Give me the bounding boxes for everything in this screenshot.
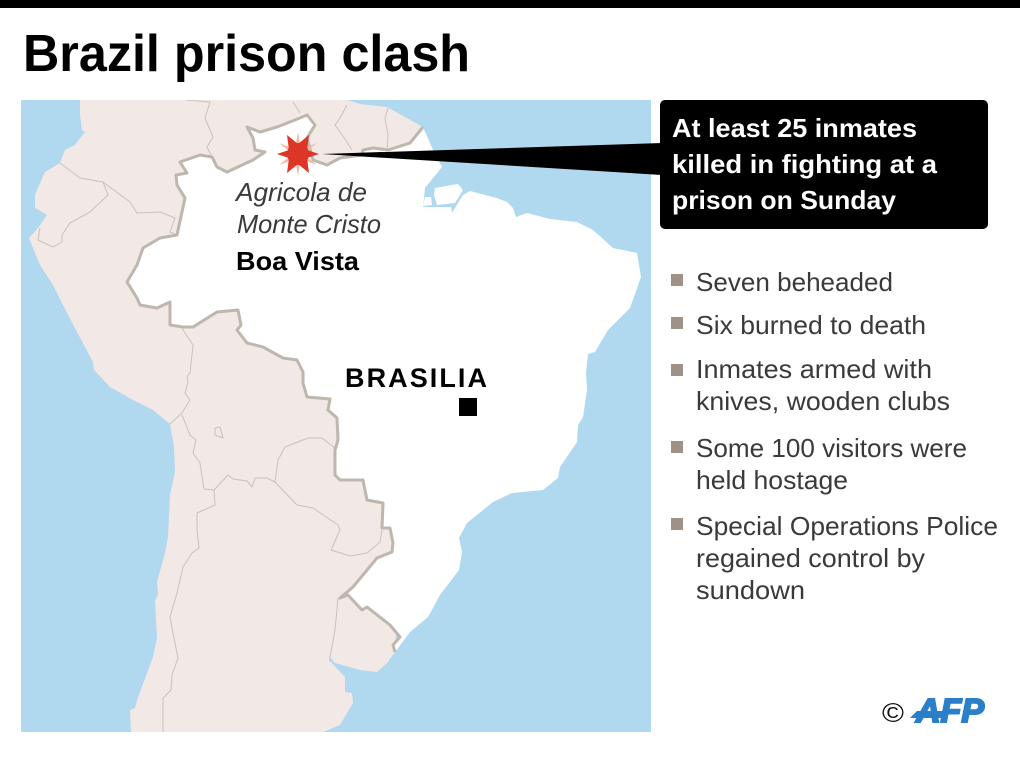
label: Agricola de Monte Cristo: Agricola de xyxy=(234,177,367,207)
country borders xyxy=(38,100,388,732)
bullet: police: Special Operations Police xyxy=(696,511,998,541)
bullet: police: regained control by xyxy=(696,543,925,573)
label: Agricola de Monte Cristo xyxy=(234,177,381,239)
bullet: six burned: Six burned to death xyxy=(696,310,926,340)
bullet: hostages: Some 100 visitors were xyxy=(696,433,967,463)
label: Boa Vista: Boa Vista xyxy=(236,246,360,276)
icon: capital marker xyxy=(459,398,477,416)
callout box: prison on Sunday xyxy=(672,185,897,215)
bullet: hostages xyxy=(671,433,967,495)
bullet: seven beheaded: Seven beheaded xyxy=(696,267,893,297)
callout box: killed in fighting at a xyxy=(672,149,938,179)
label: Agricola de Monte Cristo: Monte Cristo xyxy=(237,209,381,239)
callout pointer xyxy=(322,143,662,175)
bullet: inmates armed: Inmates armed with xyxy=(696,354,932,384)
neighbouring countries land xyxy=(29,100,423,732)
title: Brazil prison clash xyxy=(23,25,470,83)
Brazil xyxy=(127,115,641,652)
bullet: police: sundown xyxy=(696,575,805,605)
Brazil border xyxy=(127,115,423,652)
bullet: inmates armed: knives, wooden clubs xyxy=(696,386,950,416)
copyright and AFP logo: AFP xyxy=(915,692,985,729)
map of South America xyxy=(21,100,651,732)
bullet: inmates armed xyxy=(671,354,950,416)
callout box: At least 25 inmates xyxy=(672,113,917,143)
bullet list xyxy=(671,267,998,605)
icon: explosion marker xyxy=(277,132,319,176)
bullet: police xyxy=(671,511,998,605)
label: Brasilia: BRASILIA xyxy=(345,363,487,393)
Marajo island xyxy=(434,184,463,205)
bullet: hostages: held hostage xyxy=(696,465,848,495)
ocean xyxy=(21,100,651,732)
callout box xyxy=(660,100,988,229)
copyright and AFP logo: © xyxy=(882,698,904,728)
copyright and AFP logo xyxy=(882,692,985,729)
